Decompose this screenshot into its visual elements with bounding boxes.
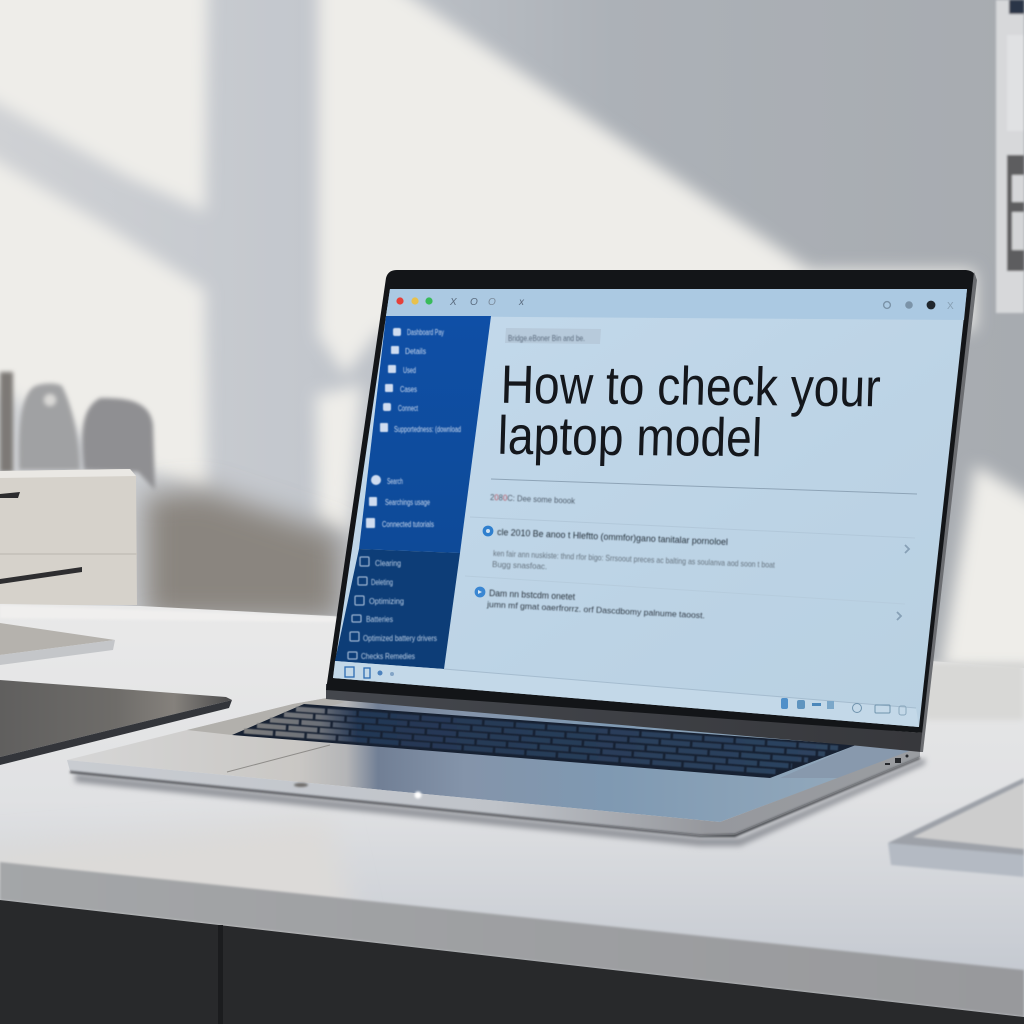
sidebar item 11: Deleting — [371, 578, 393, 587]
sidebar item 8 — [369, 497, 430, 507]
browser toolbar: x — [518, 297, 525, 308]
divider — [491, 479, 917, 494]
sidebar item 7 — [371, 475, 403, 486]
browser toolbar: X — [947, 301, 954, 312]
sidebar item 5 — [383, 403, 419, 413]
sidebar item 7: Search — [387, 477, 403, 486]
front notch — [294, 783, 308, 787]
sidebar upper — [359, 316, 491, 553]
sidebar item 15: Checks Remedies — [361, 652, 415, 661]
sidebar item 13: Batteries — [366, 615, 393, 624]
list item 1: cle 2010 Be anoo t Hleftto (ommfor)gano tanitalar pornoloel — [497, 527, 728, 548]
sidebar item 2: Details — [405, 347, 426, 356]
title: laptop model — [497, 405, 763, 468]
title — [497, 354, 881, 469]
list item 2: jumn mf gmat oaerfrorrz. orf Dascdbomy palnume taoost. — [486, 599, 705, 620]
laptop shadow — [75, 758, 925, 846]
wall picture frame — [996, 0, 1024, 313]
sidebar item 1 — [393, 328, 444, 337]
sidebar item 5: Connect — [398, 404, 419, 413]
browser toolbar: X — [449, 297, 457, 308]
list item 1 — [470, 517, 915, 571]
browser toolbar — [386, 289, 967, 320]
tablet on desk right — [888, 778, 1024, 877]
wall background — [0, 0, 1024, 690]
list item 2: Dam nn bstcdm onetet — [489, 588, 576, 602]
section label: 2080C: Dee some boook — [490, 492, 576, 506]
breadcrumb chip: Bridge.eBoner Bin and be. — [508, 333, 585, 343]
sidebar item 6 — [380, 423, 461, 434]
closed dark laptop left — [0, 680, 232, 765]
desk underside — [0, 900, 1024, 1024]
laptop base deck — [67, 698, 922, 837]
list item 1: Bugg snasfoac. — [492, 560, 547, 571]
browser toolbar: O — [470, 297, 478, 308]
sidebar item 1: Dashboard Pay — [407, 328, 444, 337]
taskbar — [333, 661, 919, 727]
sidebar item 3: Used — [403, 366, 416, 375]
sidebar item 2 — [391, 346, 426, 356]
keyboard — [232, 704, 856, 778]
sidebar item 4 — [385, 384, 417, 394]
sidebar item 3 — [388, 365, 416, 375]
sidebar item 9: Connected tutorials — [382, 520, 434, 529]
cabinet with drawers — [0, 469, 137, 605]
sidebar item 4: Cases — [400, 385, 417, 394]
ports — [885, 754, 908, 765]
touchpad edge — [227, 745, 330, 772]
screen bezel — [326, 270, 976, 733]
sidebar item 8: Searchings usage — [385, 498, 430, 507]
sidebar item 9 — [366, 518, 434, 529]
laptop — [67, 270, 977, 837]
sidebar item 10: Clearing — [375, 559, 401, 568]
desk front edge — [0, 862, 1024, 1017]
hinge — [326, 684, 923, 752]
shelf objects: vases — [0, 372, 155, 490]
browser toolbar: O — [488, 297, 496, 308]
screen display — [333, 289, 967, 727]
front highlight — [414, 792, 422, 798]
breadcrumb chip — [505, 328, 601, 344]
sidebar lower — [335, 549, 460, 669]
sidebar item 6: Supportedness: (download — [394, 425, 461, 434]
tablet on desk left — [0, 623, 115, 665]
list item 1: ken fair ann nuskiste: thnd rfor bigo: Srrsoout preces ac balting as soulanva aod soon t boat — [493, 549, 776, 570]
cabinet wall shadow — [145, 490, 340, 620]
sidebar item 12: Optimizing — [369, 597, 404, 606]
sidebar item 14: Optimized battery drivers — [363, 634, 437, 643]
desk cabinet divider — [218, 925, 223, 1024]
list item 2 — [465, 576, 905, 620]
title: How to check your — [500, 354, 881, 418]
desk surface — [0, 604, 1024, 980]
